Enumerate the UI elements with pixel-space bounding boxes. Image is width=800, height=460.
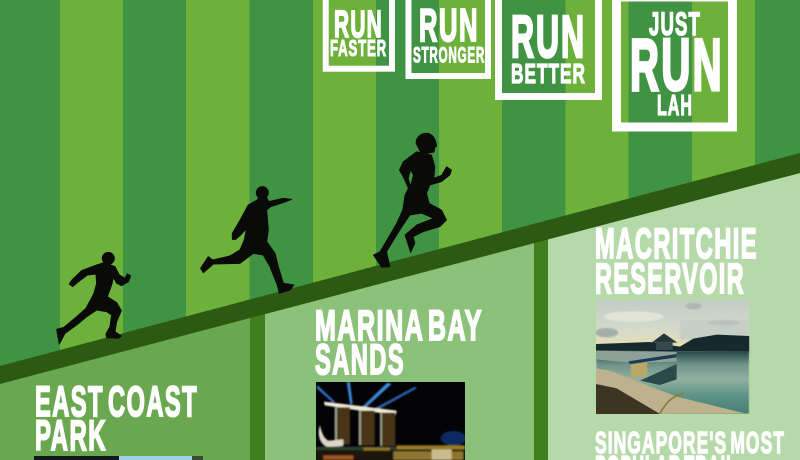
heading: East Coast Park: PARK bbox=[35, 412, 107, 460]
badge: Just Run Lah: JUST bbox=[649, 6, 701, 42]
badge: Just Run Lah: RUN bbox=[630, 25, 724, 106]
icon: second runner silhouette bbox=[201, 187, 294, 293]
heading: Marina Bay Sands: MARINA BAY bbox=[315, 302, 483, 350]
icon: third runner silhouette bbox=[373, 133, 452, 267]
badge: Run Better: RUN bbox=[511, 4, 586, 70]
badge: Run Stronger: STRONGER bbox=[413, 42, 485, 68]
panel: MacRitchie Reservoir background bbox=[548, 173, 800, 460]
divider between Marina Bay and MacRitchie panels bbox=[534, 239, 548, 460]
heading: MacRitchie Reservoir bbox=[595, 220, 758, 303]
divider between park and Marina Bay panels bbox=[250, 314, 265, 460]
badge: Run Better bbox=[498, 0, 598, 96]
icon: first runner silhouette bbox=[57, 252, 131, 344]
heading: East Coast Park: EAST COAST bbox=[35, 378, 198, 426]
sloped hill band bbox=[0, 153, 800, 384]
badge: Run Better: BETTER bbox=[511, 58, 586, 89]
heading: Marina Bay Sands: SANDS bbox=[315, 336, 405, 384]
badge: Run Faster: FASTER bbox=[330, 35, 387, 61]
badge: Run Faster: RUN bbox=[334, 4, 383, 46]
badge: Run Stronger: RUN bbox=[419, 0, 479, 51]
badge: Run Faster bbox=[326, 0, 392, 69]
photo: Marina Bay Sands at night bbox=[316, 382, 466, 460]
badge: Just Run Lah bbox=[616, 0, 732, 127]
photo: MacRitchie Reservoir bbox=[595, 300, 749, 414]
photo: East Coast Park bbox=[34, 456, 203, 460]
badge: Just Run Lah: LAH bbox=[657, 90, 693, 122]
badge: Run Stronger bbox=[408, 0, 488, 76]
heading: Marina Bay Sands bbox=[315, 302, 483, 384]
heading: East Coast Park bbox=[35, 378, 198, 460]
panel: Marina Bay Sands background bbox=[265, 243, 534, 460]
panel: East Coast Park background bbox=[0, 318, 250, 460]
